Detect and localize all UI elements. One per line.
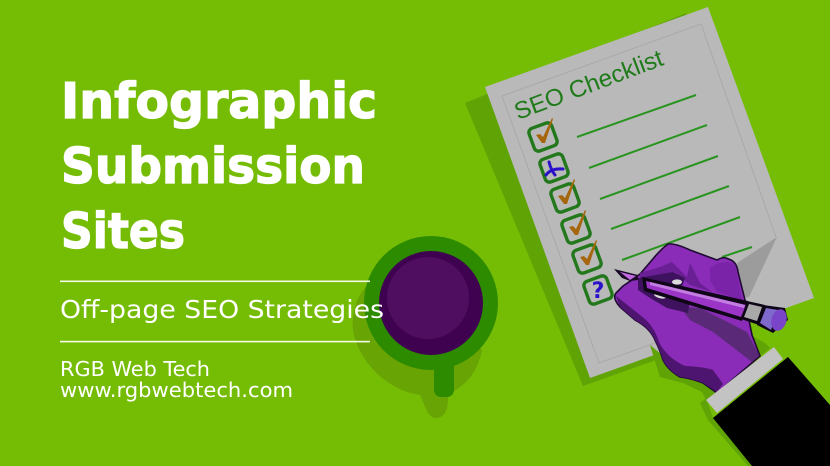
checklist paper [465, 7, 814, 386]
wrist shade [680, 307, 759, 362]
title: Sites [61, 203, 185, 260]
checkbox 5: checked [572, 240, 602, 274]
icon: hand with pencil [614, 244, 830, 466]
brand text: RGB Web Tech [60, 357, 210, 381]
subtitle: Off-page SEO Strategies [60, 295, 384, 324]
pencil ferrule [741, 301, 765, 325]
knuckle highlight [710, 262, 742, 300]
finger shade [640, 262, 712, 292]
suit sleeve [713, 357, 830, 466]
rule: upper divider [60, 280, 370, 282]
grip shadow [638, 272, 690, 313]
cup rim [364, 236, 498, 370]
finger gaps [672, 279, 682, 285]
hand shadow [650, 345, 717, 400]
checkbox 2: crossed [539, 153, 569, 183]
checkbox 6: question: ? [592, 279, 604, 304]
checklist lines [577, 95, 752, 260]
paper sheet [485, 7, 814, 378]
cup shadow [353, 275, 482, 418]
coffee highlight [387, 257, 469, 339]
pencil eraser [757, 305, 788, 333]
icon: coffee cup [353, 236, 498, 418]
wrist side shadow [750, 335, 770, 358]
title [61, 73, 377, 260]
title: Infographic [61, 73, 377, 130]
paper fold shade [737, 237, 777, 298]
checkbox 4: checked [561, 210, 591, 244]
sleeve shadow [700, 398, 754, 466]
hand lower shade [616, 296, 723, 392]
title: Submission [61, 138, 365, 195]
coffee [379, 251, 483, 355]
checkbox 6: question [583, 275, 613, 305]
checklist heading: SEO Checklist [511, 45, 667, 126]
rule: lower divider [60, 341, 370, 342]
cup handle [434, 355, 454, 397]
paper inner border [502, 24, 776, 363]
pencil body [642, 277, 748, 321]
brand text [60, 357, 293, 402]
paper shadow [465, 13, 740, 386]
shirt cuff [706, 347, 783, 413]
hand fill [615, 244, 760, 393]
checkbox 3: checked [550, 179, 580, 213]
pencil tip [614, 269, 638, 281]
brand text: www.rgbwebtech.com [60, 378, 293, 402]
checkbox 1: checked [528, 118, 558, 152]
